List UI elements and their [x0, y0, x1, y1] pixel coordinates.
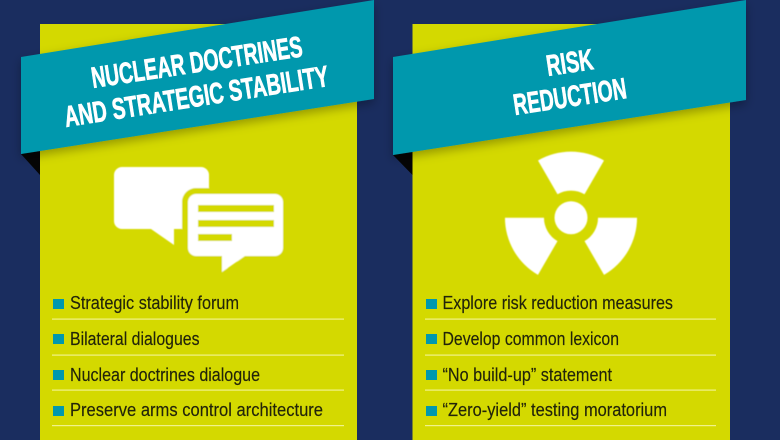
heading — [62, 30, 331, 134]
ribbon fold — [21, 150, 40, 175]
item 2: Bilateral dialogues — [70, 328, 200, 349]
icon: radiation symbol — [497, 152, 645, 279]
panel background — [412, 24, 730, 440]
item 1: Explore risk reduction measures — [442, 292, 673, 313]
item 3: “No build-up” statement — [442, 364, 612, 385]
item 4: “Zero-yield” testing moratorium — [442, 399, 667, 420]
heading: REDUCTION — [511, 72, 629, 122]
item 2: Develop common lexicon — [442, 328, 619, 349]
item 3: Nuclear doctrines dialogue — [70, 364, 260, 385]
panel: risk reduction — [393, 0, 746, 440]
icon: speech bubbles — [114, 167, 289, 276]
heading: AND STRATEGIC STABILITY — [62, 60, 331, 134]
list: strategic stability items — [52, 292, 344, 426]
ribbon banner — [393, 0, 746, 155]
ribbon fold — [393, 150, 412, 175]
item 4: Preserve arms control architecture — [70, 399, 323, 420]
heading — [511, 43, 629, 122]
panel: nuclear doctrines and strategic stability — [21, 0, 374, 440]
list: risk reduction items — [425, 292, 716, 426]
panel background — [40, 24, 357, 440]
heading: RISK — [544, 43, 596, 83]
heading: NUCLEAR DOCTRINES — [89, 30, 305, 95]
ribbon banner — [21, 0, 374, 154]
item 1: Strategic stability forum — [70, 292, 239, 313]
